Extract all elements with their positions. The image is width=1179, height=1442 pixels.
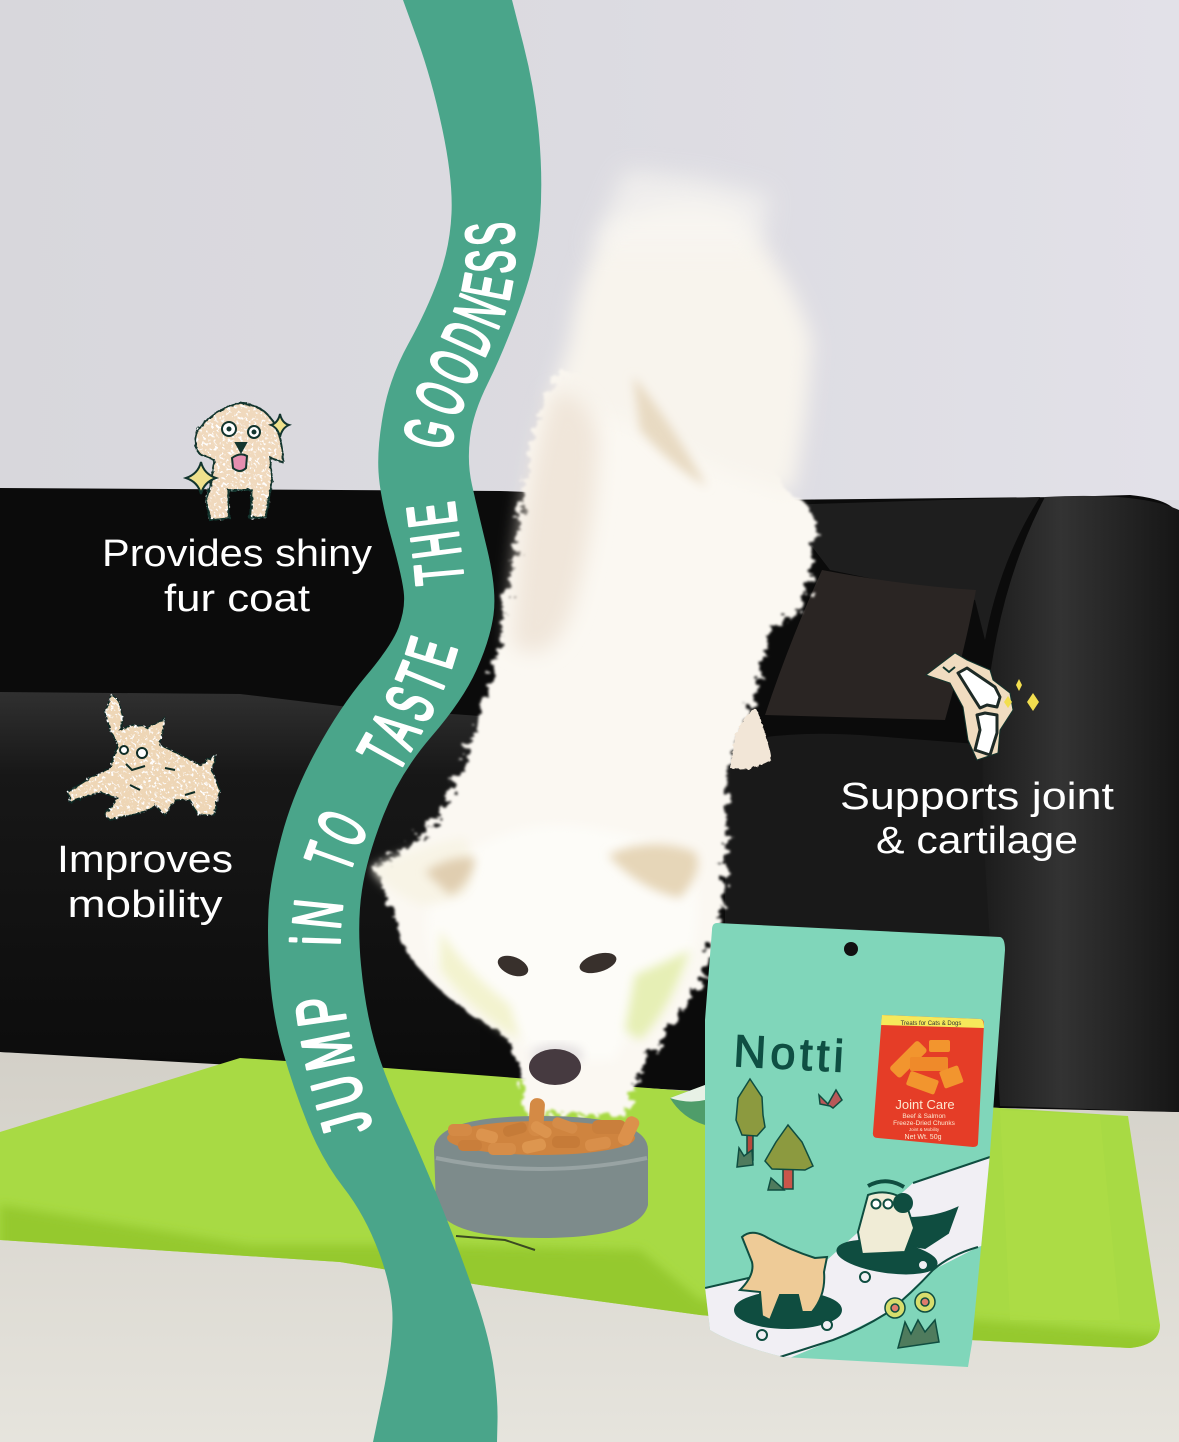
sparkle right: [271, 414, 289, 437]
dog nose: [529, 1049, 581, 1085]
pouch hole: [844, 942, 858, 956]
sofa back right: [780, 497, 1040, 640]
dark brown cushion: [765, 570, 976, 720]
label: shiny fur coat: fur coat: [164, 578, 311, 620]
label: improves mobility: [57, 839, 233, 926]
label: shiny fur coat: Provides shiny: [102, 533, 372, 575]
sofa armrest: [982, 496, 1179, 1112]
label: shiny fur coat: [102, 533, 372, 620]
product label: Freeze-Dried Chunks: [893, 1120, 956, 1127]
ribbon tagline: TO: [304, 812, 366, 868]
dog body: [375, 370, 815, 1115]
brand name: Notti: [732, 1025, 845, 1082]
cheek tint right: [625, 950, 690, 1040]
green mat: [0, 1050, 1179, 1360]
sofa seat left: [0, 692, 480, 1070]
ribbon tagline: JUMP: [296, 1000, 372, 1134]
floor: [0, 1050, 1179, 1442]
benefit: joint support: [840, 653, 1115, 862]
product pouch: [700, 923, 1005, 1367]
tail wisps: [590, 170, 770, 250]
ribbon tagline: TASTE: [356, 635, 458, 768]
label: improves mobility: mobility: [68, 884, 222, 926]
dog eye left: [495, 952, 531, 980]
product label: Joint Care: [895, 1097, 955, 1112]
dog right ear: [608, 844, 698, 898]
kibble on label: [889, 1040, 964, 1095]
dog nose shading: [532, 1044, 582, 1062]
small wrapper behind pouch: [670, 1085, 705, 1125]
ribbon tagline: GOODNESS: [404, 223, 516, 447]
benefit: shiny fur coat: [102, 403, 372, 620]
product label: Beef & Salmon: [902, 1113, 946, 1120]
icon: knee joint: [926, 653, 1039, 760]
label: supports joint: Supports joint: [840, 776, 1115, 818]
product label: Joint & Mobility: [909, 1127, 940, 1132]
skateboard cat: [835, 1181, 957, 1282]
dog head: [427, 825, 697, 1060]
white dog: [372, 170, 815, 1115]
icon: running dog: [68, 695, 220, 820]
butterfly: [819, 1090, 842, 1108]
label: supports joint: [840, 776, 1115, 862]
pouch body: [705, 923, 1005, 1367]
dog tail: [550, 204, 812, 495]
twig under bowl: [456, 1236, 535, 1250]
benefit: mobility: [57, 695, 233, 926]
wall background: [0, 0, 1179, 500]
tail crease: [633, 376, 707, 487]
kibble: [447, 1098, 641, 1155]
road on pouch: [700, 1153, 1000, 1362]
dog paw: [730, 709, 771, 769]
ribbon tagline: iN: [288, 900, 344, 944]
product label: [873, 1015, 984, 1147]
product label: Treats for Cats & Dogs: [901, 1021, 961, 1027]
black sofa: [0, 488, 1179, 1112]
sparkle left: [186, 462, 216, 494]
tree right: [765, 1125, 813, 1190]
flowers and grass: [885, 1292, 939, 1348]
food bowl: [434, 1098, 648, 1250]
cheek tint left: [440, 930, 520, 1040]
dog left ear: [372, 838, 472, 905]
green ribbon: [268, 0, 541, 1442]
label: improves mobility: Improves: [57, 839, 233, 881]
dog eye right: [577, 949, 619, 977]
skateboard dog: [735, 1233, 841, 1340]
label: supports joint: & cartilage: [876, 820, 1078, 862]
back shading: [512, 393, 598, 652]
ribbon tagline: THE: [406, 501, 464, 586]
ribbon tagline: [288, 223, 516, 1134]
icon: shiny dog: [186, 403, 289, 520]
sofa seat right: [725, 734, 990, 1100]
tree left: [736, 1079, 765, 1167]
product label: Net Wt. 50g: [905, 1134, 942, 1141]
